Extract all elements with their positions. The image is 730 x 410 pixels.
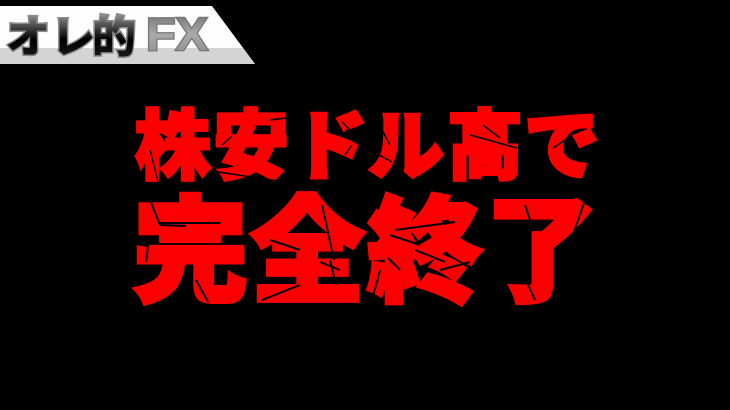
headline line 2: 完全終了 [133,189,599,317]
cracks in line 2 [136,200,585,302]
cracks in line 1 [150,118,565,182]
banner text: オレ的: オレ的 [6,13,136,62]
logo banner [0,6,255,64]
banner plate [0,6,255,64]
banner text: FX: FX [146,8,208,60]
banner lower band [0,48,255,64]
headline line 1: 株安ドル高で [135,105,600,190]
